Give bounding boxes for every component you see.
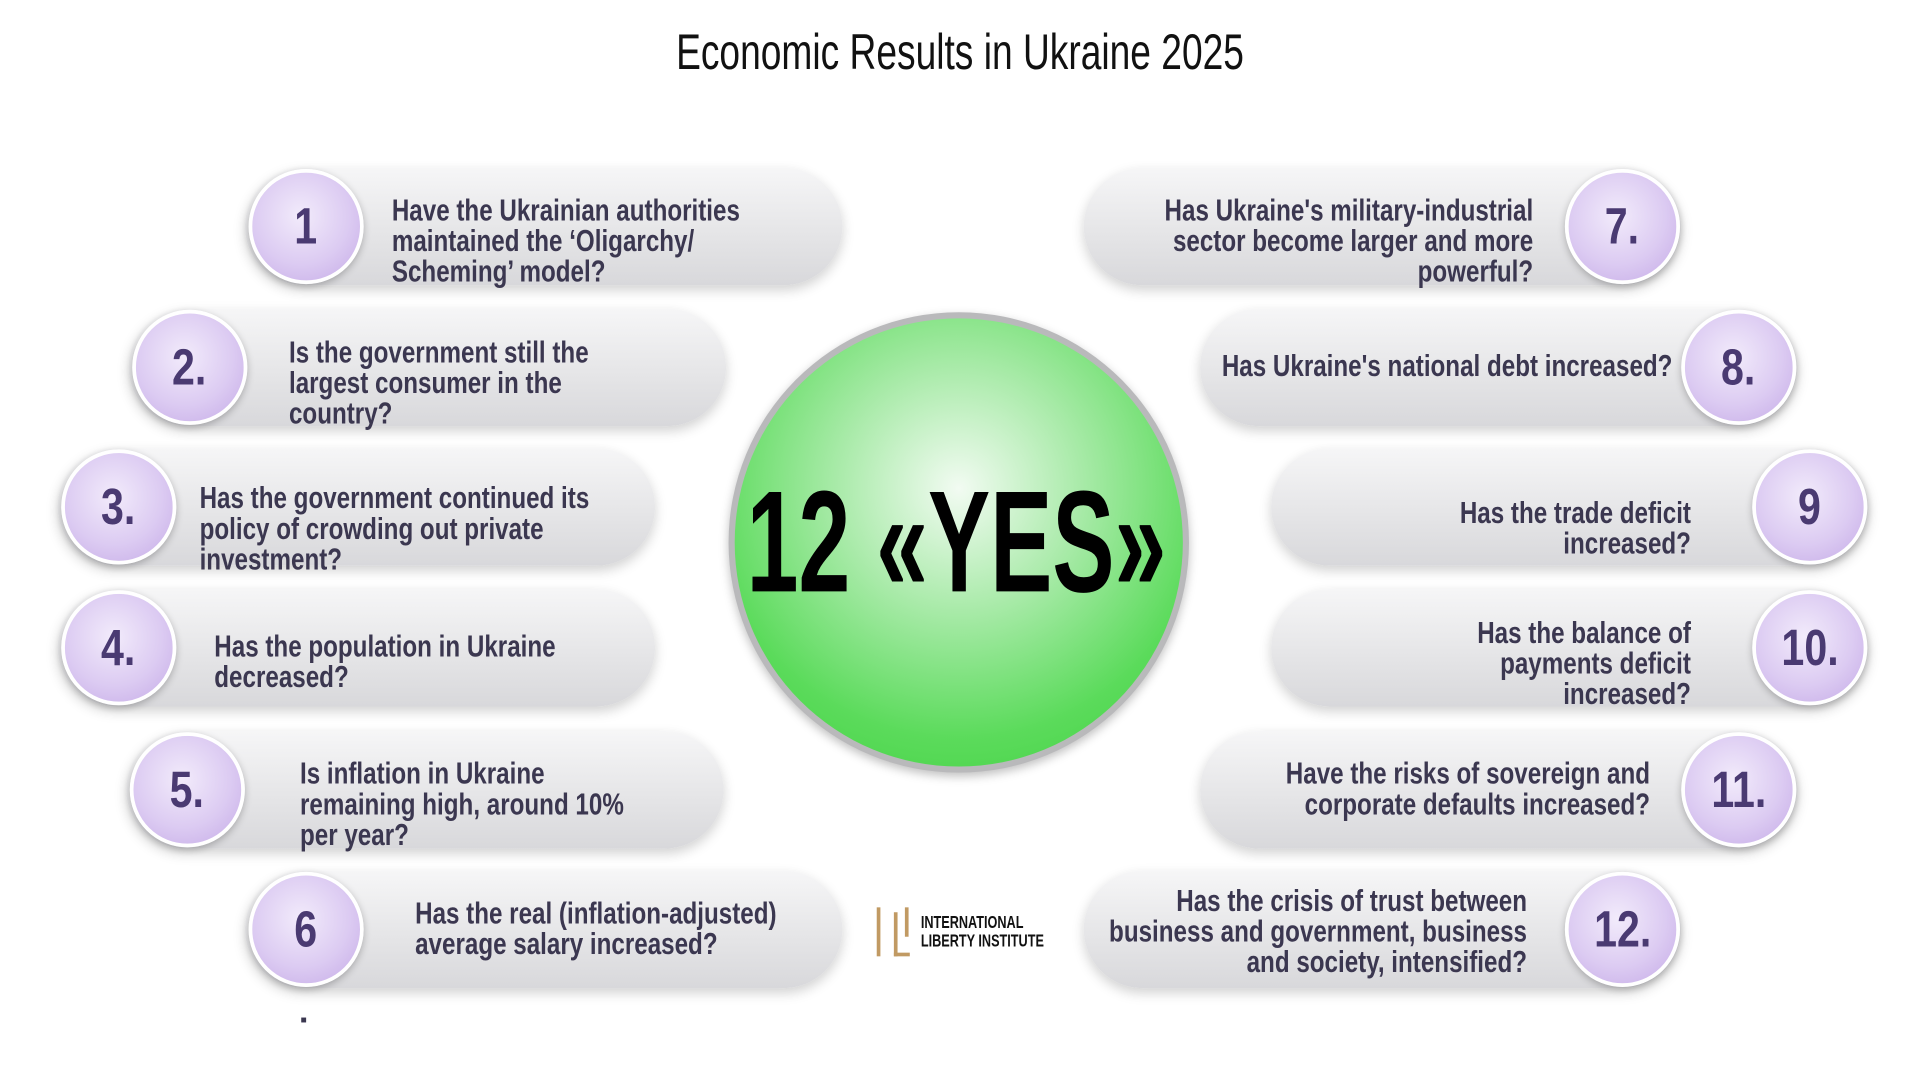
item 7 (1084, 168, 1681, 285)
item 9: increased? (1563, 527, 1691, 561)
item 11: Have the risks of sovereign and (1286, 757, 1651, 791)
item 6: 6 (295, 900, 318, 958)
item 7: Has Ukraine's military-industrial (1164, 193, 1533, 228)
item 4 (58, 589, 655, 707)
item 8: 8. (1722, 338, 1756, 396)
item 2: 2. (173, 338, 207, 396)
item 3: investment? (200, 542, 342, 577)
item 10: payments deficit (1500, 647, 1691, 681)
item 5 (126, 731, 724, 849)
item 5: remaining high, around 10% (300, 787, 624, 822)
item 2: country? (289, 397, 392, 431)
item 12: business and government, business (1109, 915, 1527, 949)
item 4: decreased? (214, 660, 349, 694)
item 10: 10. (1781, 618, 1838, 676)
item 2: Is the government still the (289, 336, 589, 370)
item 12: Has the crisis of trust between (1176, 884, 1527, 918)
item 1 (245, 168, 842, 285)
item 1: maintained the ‘Oligarchy/ (392, 224, 694, 258)
item 3: policy of crowding out private (200, 512, 544, 546)
item 5: per year? (300, 818, 409, 852)
item 12 (1084, 871, 1681, 988)
item 10: increased? (1563, 677, 1691, 711)
item 1: Have the Ukrainian authorities (392, 193, 740, 228)
item 3: Has the government continued its (200, 481, 589, 516)
item 2: largest consumer in the (289, 366, 562, 400)
item 4: 4. (102, 618, 136, 676)
item 8 (1200, 309, 1798, 426)
item 8: Has Ukraine's national debt increased? (1222, 349, 1673, 383)
item 12: and society, intensified? (1247, 945, 1527, 980)
small dot (301, 1018, 306, 1022)
item 5: 5. (170, 760, 205, 818)
item 5: Is inflation in Ukraine (300, 757, 545, 791)
item 10: Has the balance of (1477, 616, 1691, 650)
logo (876, 907, 1044, 956)
big text: 12 «YES» (747, 462, 1166, 623)
item 3: 3. (102, 478, 136, 535)
item 1: 1 (295, 197, 318, 255)
item 11: corporate defaults increased? (1305, 787, 1651, 822)
item 6: average salary increased? (415, 927, 718, 961)
logo: LIBERTY INSTITUTE (921, 931, 1044, 950)
item 9: Has the trade deficit (1460, 496, 1691, 530)
item 4: Has the population in Ukraine (214, 629, 556, 664)
item 3 (58, 448, 655, 566)
item 9 (1271, 448, 1869, 566)
item 6: Has the real (inflation-adjusted) (415, 896, 777, 931)
item 9: 9 (1798, 478, 1821, 535)
item 7: powerful? (1418, 255, 1533, 289)
item 1: Scheming’ model? (392, 255, 605, 289)
item 12: 12. (1594, 900, 1651, 958)
item 2 (129, 309, 726, 426)
item 11: 11. (1711, 760, 1766, 818)
title: Economic Results in Ukraine 2025 (676, 24, 1244, 80)
central circle (729, 312, 1189, 773)
item 6 (245, 871, 842, 988)
item 10 (1271, 589, 1869, 707)
item 11 (1200, 731, 1798, 849)
logo: INTERNATIONAL (921, 912, 1023, 932)
item 7: 7. (1605, 197, 1640, 255)
item 7: sector become larger and more (1173, 224, 1533, 258)
